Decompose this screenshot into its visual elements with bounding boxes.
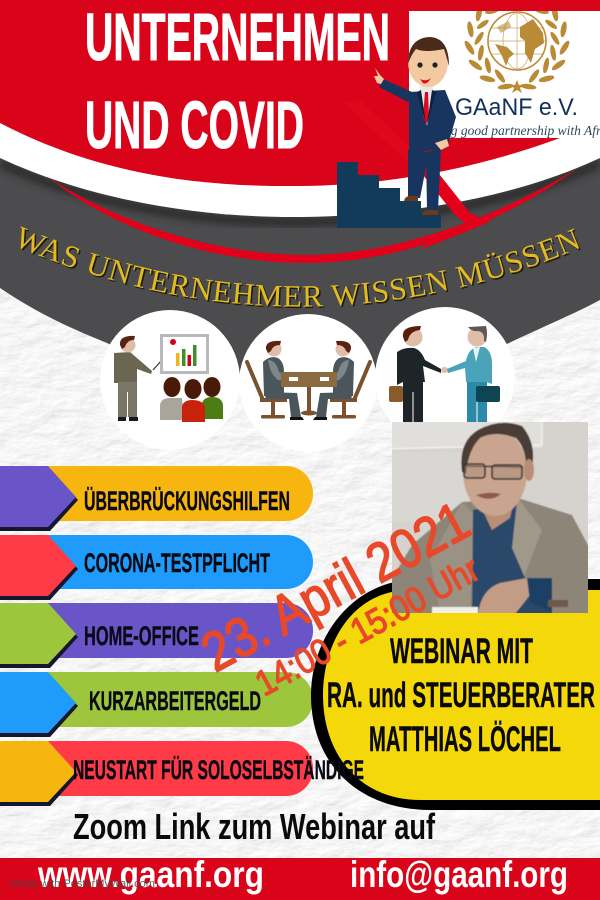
pill: Neustart xyxy=(0,741,313,806)
webinar panel xyxy=(311,579,600,810)
icon: businessman xyxy=(374,37,456,215)
red crescent xyxy=(48,168,578,263)
pill: Kurzarbeitergeld xyxy=(0,672,313,737)
watermark: Made with PosterMyWall.com xyxy=(10,878,155,890)
logo xyxy=(409,0,600,138)
icon: stairs xyxy=(337,162,441,228)
pill: Home-Office: HOME-OFFICE xyxy=(84,621,199,651)
subheading: WAS UNTERNEHMER WISSEN MÜSSEN xyxy=(22,229,581,308)
red header area xyxy=(0,0,600,186)
title: UNTERNEHMEN xyxy=(85,0,390,75)
footer bar xyxy=(0,854,600,900)
circle: presentation xyxy=(100,310,240,450)
speaker photo xyxy=(392,422,588,613)
pill: Home-Office xyxy=(0,603,313,668)
grey arc band xyxy=(0,158,600,374)
icon: globe and laurel xyxy=(464,11,570,93)
icon: left man xyxy=(389,326,441,424)
circle: handshake xyxy=(375,307,515,447)
icon: handshake hands xyxy=(441,367,448,373)
icon: presenter xyxy=(114,336,171,421)
icon: chart board xyxy=(162,336,208,372)
subheading: WAS UNTERNEHMER WISSEN MÜSSEN xyxy=(20,226,580,307)
pill: Überbrückungshilfen xyxy=(0,466,313,531)
pill: Überbrückungshilfen: ÜBERBRÜCKUNGSHILFEN xyxy=(84,486,290,516)
icon: right seated man xyxy=(313,341,370,420)
webinar text xyxy=(327,632,595,759)
icon: table xyxy=(281,372,337,416)
title xyxy=(85,0,390,163)
zoom link text: Zoom Link zum Webinar auf xyxy=(73,806,436,847)
pill: Kurzarbeitergeld: KURZARBEITERGELD xyxy=(89,686,261,716)
circle: meeting xyxy=(239,314,377,452)
date: 23. April 2021 xyxy=(191,489,479,684)
time: 14:00 - 15:00 Uhr xyxy=(248,548,486,704)
pill: Corona-Testpflicht xyxy=(0,535,313,600)
icon: right man xyxy=(447,326,500,424)
icon: audience xyxy=(160,377,223,422)
icon: left seated man xyxy=(247,341,304,420)
pill text: Neustart: NEUSTART FÜR SOLOSELBSTÄNDIGE xyxy=(73,755,364,785)
logo name: GAaNF e.V. xyxy=(455,94,578,121)
white swoosh xyxy=(0,100,600,217)
ribbon xyxy=(344,100,490,250)
website: www.gaanf.org xyxy=(37,854,264,895)
title: UND COVID xyxy=(85,88,304,163)
pill: Corona-Testpflicht: CORONA-TESTPFLICHT xyxy=(84,548,270,578)
